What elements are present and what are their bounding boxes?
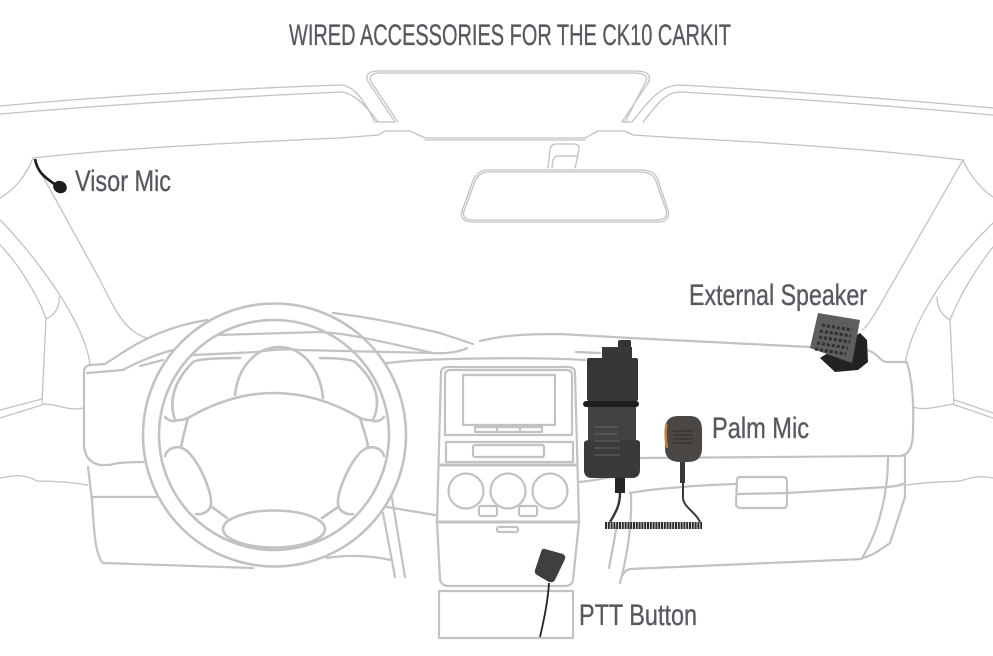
icon: external speaker — [810, 313, 868, 372]
dashboard outline — [84, 313, 913, 583]
label: external speaker: External Speaker — [689, 279, 867, 312]
icon: visor mic — [35, 159, 69, 195]
icon: palm mic — [605, 416, 702, 526]
icon: PTT button — [535, 549, 565, 637]
steering wheel — [143, 304, 406, 566]
rearview mirror — [461, 144, 669, 222]
label: visor mic: Visor Mic — [75, 165, 171, 198]
label: PTT button: PTT Button — [579, 599, 697, 632]
label: palm mic: Palm Mic — [712, 412, 809, 445]
title: WIRED ACCESSORIES FOR THE CK10 CARKIT — [289, 19, 731, 52]
icon: radio in cradle — [583, 340, 640, 522]
windshield and roof lines — [0, 71, 993, 485]
center console — [437, 367, 787, 638]
